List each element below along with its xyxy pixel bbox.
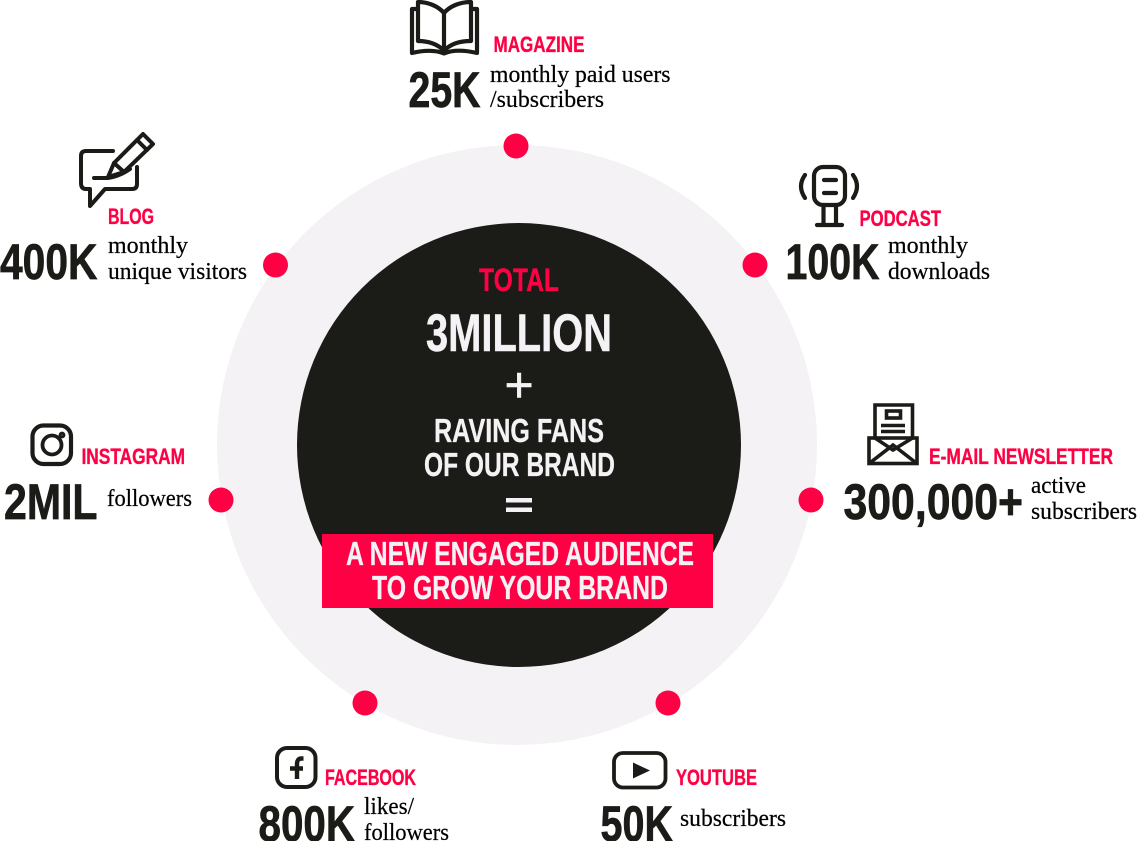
icon: envelope with newsletter xyxy=(869,405,917,464)
figure: 2MIL: 2MIL xyxy=(4,473,98,530)
panel: magazine: /subscribers xyxy=(490,87,604,113)
heading: total: TOTAL xyxy=(479,262,559,298)
description: monthly xyxy=(888,233,968,259)
dark central circle xyxy=(297,223,741,667)
figure: 25K: 25K xyxy=(408,61,480,118)
description: subscribers xyxy=(680,806,786,832)
panel: e-mail newsletter: subscribers xyxy=(1031,499,1137,525)
panel: podcast: downloads xyxy=(888,259,990,285)
panel: youtube xyxy=(600,753,786,841)
description: active xyxy=(1031,473,1086,499)
icon: youtube play button xyxy=(614,753,666,788)
icon: facebook logo xyxy=(277,748,316,787)
panel: blog xyxy=(0,134,247,290)
panel: e-mail newsletter xyxy=(844,405,1137,530)
label: podcast: PODCAST xyxy=(860,206,941,231)
figure: 400K: 400K xyxy=(0,233,98,290)
panel: blog: unique visitors xyxy=(108,259,247,285)
panel: instagram xyxy=(4,426,192,530)
panel: magazine xyxy=(408,2,670,118)
label: facebook: FACEBOOK xyxy=(325,765,416,790)
panel: facebook xyxy=(258,748,449,841)
figure: 100K: 100K xyxy=(786,233,880,290)
callout: new engaged audience xyxy=(322,534,713,608)
icon: microphone xyxy=(801,167,857,225)
panel: central message xyxy=(322,262,713,608)
panel: podcast xyxy=(786,167,990,290)
description: monthly paid users xyxy=(490,62,670,88)
icon: instagram camera xyxy=(32,426,71,464)
callout: new engaged audience: A NEW ENGAGED AUDIENCE xyxy=(346,535,694,572)
light outer ring circle xyxy=(217,145,817,745)
description: followers xyxy=(107,486,192,512)
ring marker dots xyxy=(208,134,824,716)
callout: new engaged audience: TO GROW YOUR BRAND xyxy=(372,569,668,606)
text: raving fans: RAVING FANS xyxy=(434,412,604,449)
label: blog: BLOG xyxy=(108,204,154,229)
label: magazine: MAGAZINE xyxy=(494,32,584,57)
text: of our brand: OF OUR BRAND xyxy=(424,446,615,483)
description: monthly xyxy=(108,233,188,259)
icon: open book xyxy=(412,2,477,54)
plus sign: + xyxy=(504,357,534,413)
equals sign xyxy=(506,498,532,512)
description: likes/ xyxy=(364,794,414,820)
icon: speech bubble with pencil xyxy=(81,134,153,206)
label: instagram: INSTAGRAM xyxy=(82,444,185,469)
figure: 300,000+: 300,000+ xyxy=(844,473,1023,530)
figure: 3 million: 3MILLION xyxy=(426,304,612,363)
label: youtube: YOUTUBE xyxy=(676,765,757,790)
